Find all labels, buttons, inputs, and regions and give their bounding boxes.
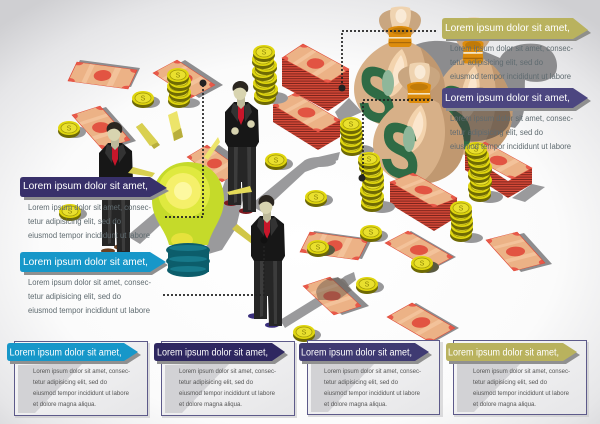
coin stack 6 <box>450 201 483 243</box>
coin stack 1: S <box>262 50 267 56</box>
connector dotted lines <box>163 31 436 295</box>
mid right text block: eiusmod tempor incididunt ut labore <box>450 142 572 151</box>
figure shadow over banknote <box>316 278 352 300</box>
panel 1 blue: Lorem ipsum dolor sit amet, <box>10 348 122 358</box>
panel 3 purple: eiusmod tempor incididunt ut labore <box>324 390 420 397</box>
money stack B <box>266 89 347 150</box>
left text block 2: Lorem ipsum dolor sit amet, consec- <box>28 278 151 287</box>
single coins: S <box>365 282 370 288</box>
connector dots <box>200 80 366 182</box>
panel 4 olive: et dolore magna aliqua. <box>473 401 536 408</box>
panel 1 blue: Lorem ipsum dolor sit amet, consec- <box>33 368 130 375</box>
left text block 1: eiusmod tempor incididunt ut labore <box>28 231 151 240</box>
mid right text block: Lorem ipsum dolor sit amet, consec- <box>450 114 573 123</box>
panel 1 blue: et dolore magna aliqua. <box>33 401 96 408</box>
panel 3 purple: tetur adipisicing elit, sed do <box>324 379 398 386</box>
top right text block: Lorem ipsum dolor sit amet, consec- <box>450 44 573 53</box>
panel 2 purple: eiusmod tempor incididunt ut labore <box>179 390 275 397</box>
man front <box>248 195 285 328</box>
top right banner olive: Lorem ipsum dolor sit amet, <box>445 23 570 34</box>
top right text block <box>450 44 573 81</box>
single coins <box>58 91 439 342</box>
coin stack 5: S <box>474 146 479 154</box>
panel 4 olive: eiusmod tempor incididunt ut labore <box>473 390 569 397</box>
top right banner olive <box>442 18 591 41</box>
single coins: S <box>68 208 73 216</box>
left banner purple: Lorem ipsum dolor sit amet, <box>23 181 148 192</box>
coin stack 6: S <box>459 206 464 212</box>
money bag back: S <box>439 66 472 172</box>
panel 2 purple: Lorem ipsum dolor sit amet, <box>157 348 268 358</box>
panel 3 purple: Lorem ipsum dolor sit amet, <box>301 348 412 358</box>
light bulb <box>152 162 224 277</box>
mid right text block <box>450 114 573 151</box>
single coins: S <box>67 126 72 132</box>
left text block 2: eiusmod tempor incididunt ut labore <box>28 306 151 315</box>
single coins: S <box>302 330 307 336</box>
money bag front: S <box>381 106 419 198</box>
left banner purple <box>20 177 169 200</box>
coin stack 4: S <box>367 156 372 164</box>
single coins: S <box>274 158 279 164</box>
panel 4 olive <box>446 340 589 417</box>
single coins: S <box>314 194 319 202</box>
panel 4 olive: Lorem ipsum dolor sit amet, consec- <box>473 368 570 375</box>
top right text block: eiusmod tempor incididunt ut labore <box>450 72 572 81</box>
panel 2 purple <box>154 342 297 418</box>
panel 1 blue: tetur adipisicing elit, sed do <box>33 379 107 386</box>
man left <box>99 122 133 254</box>
left banner blue <box>20 252 168 275</box>
panel 4 olive: tetur adipisicing elit, sed do <box>473 379 547 386</box>
single coins: S <box>316 244 321 252</box>
shadow of front bag falling on back bag <box>452 88 510 142</box>
left text block 1: Lorem ipsum dolor sit amet, consec- <box>28 203 151 212</box>
panel 3 purple: et dolore magna aliqua. <box>324 401 387 408</box>
money bag left <box>354 6 445 142</box>
panel 2 purple: et dolore magna aliqua. <box>179 401 242 408</box>
panel 2 purple: Lorem ipsum dolor sit amet, consec- <box>179 368 276 375</box>
money bag back <box>433 17 513 172</box>
single coins: S <box>369 230 374 236</box>
left text block 1 <box>28 203 151 240</box>
grey shadow blob behind the bags <box>415 41 557 128</box>
single coins: S <box>141 96 146 102</box>
coin stack 2: S <box>176 72 181 80</box>
single coins: S <box>420 260 425 268</box>
coin stack 3: S <box>349 122 354 128</box>
coin stack 5 <box>465 142 503 203</box>
mid right banner purple: Lorem ipsum dolor sit amet, <box>445 93 570 104</box>
left text block 1: tetur adipisicing elit, sed do <box>28 217 122 226</box>
panel 1 blue: eiusmod tempor incididunt ut labore <box>33 390 129 397</box>
man back with crossed arms <box>224 81 259 214</box>
coin stack 2 <box>167 68 200 108</box>
panel 3 purple: Lorem ipsum dolor sit amet, consec- <box>324 368 421 375</box>
gold bars <box>128 111 256 244</box>
left banner blue: Lorem ipsum dolor sit amet, <box>23 257 148 268</box>
coin stack 4 <box>358 152 395 213</box>
coin stack 3 <box>340 117 374 156</box>
money bag left: S <box>359 50 395 142</box>
coin stack 1 <box>252 45 288 105</box>
panel 3 purple <box>299 340 443 417</box>
money stack A <box>275 40 362 122</box>
cast shadows of figures <box>127 152 356 328</box>
money bag front <box>373 62 464 198</box>
money stack C <box>383 170 464 231</box>
panel 2 purple: tetur adipisicing elit, sed do <box>179 379 253 386</box>
panel 4 olive: Lorem ipsum dolor sit amet, <box>448 348 559 358</box>
left text block 2: tetur adipisicing elit, sed do <box>28 292 122 301</box>
loose banknotes <box>62 56 552 346</box>
panel 1 blue <box>7 342 150 418</box>
left text block 2 <box>28 278 151 315</box>
top right text block: tetur adipisicing elit, sed do <box>450 58 544 67</box>
money stack D <box>459 138 545 202</box>
mid right banner purple <box>442 88 591 111</box>
mid right text block: tetur adipisicing elit, sed do <box>450 128 544 137</box>
